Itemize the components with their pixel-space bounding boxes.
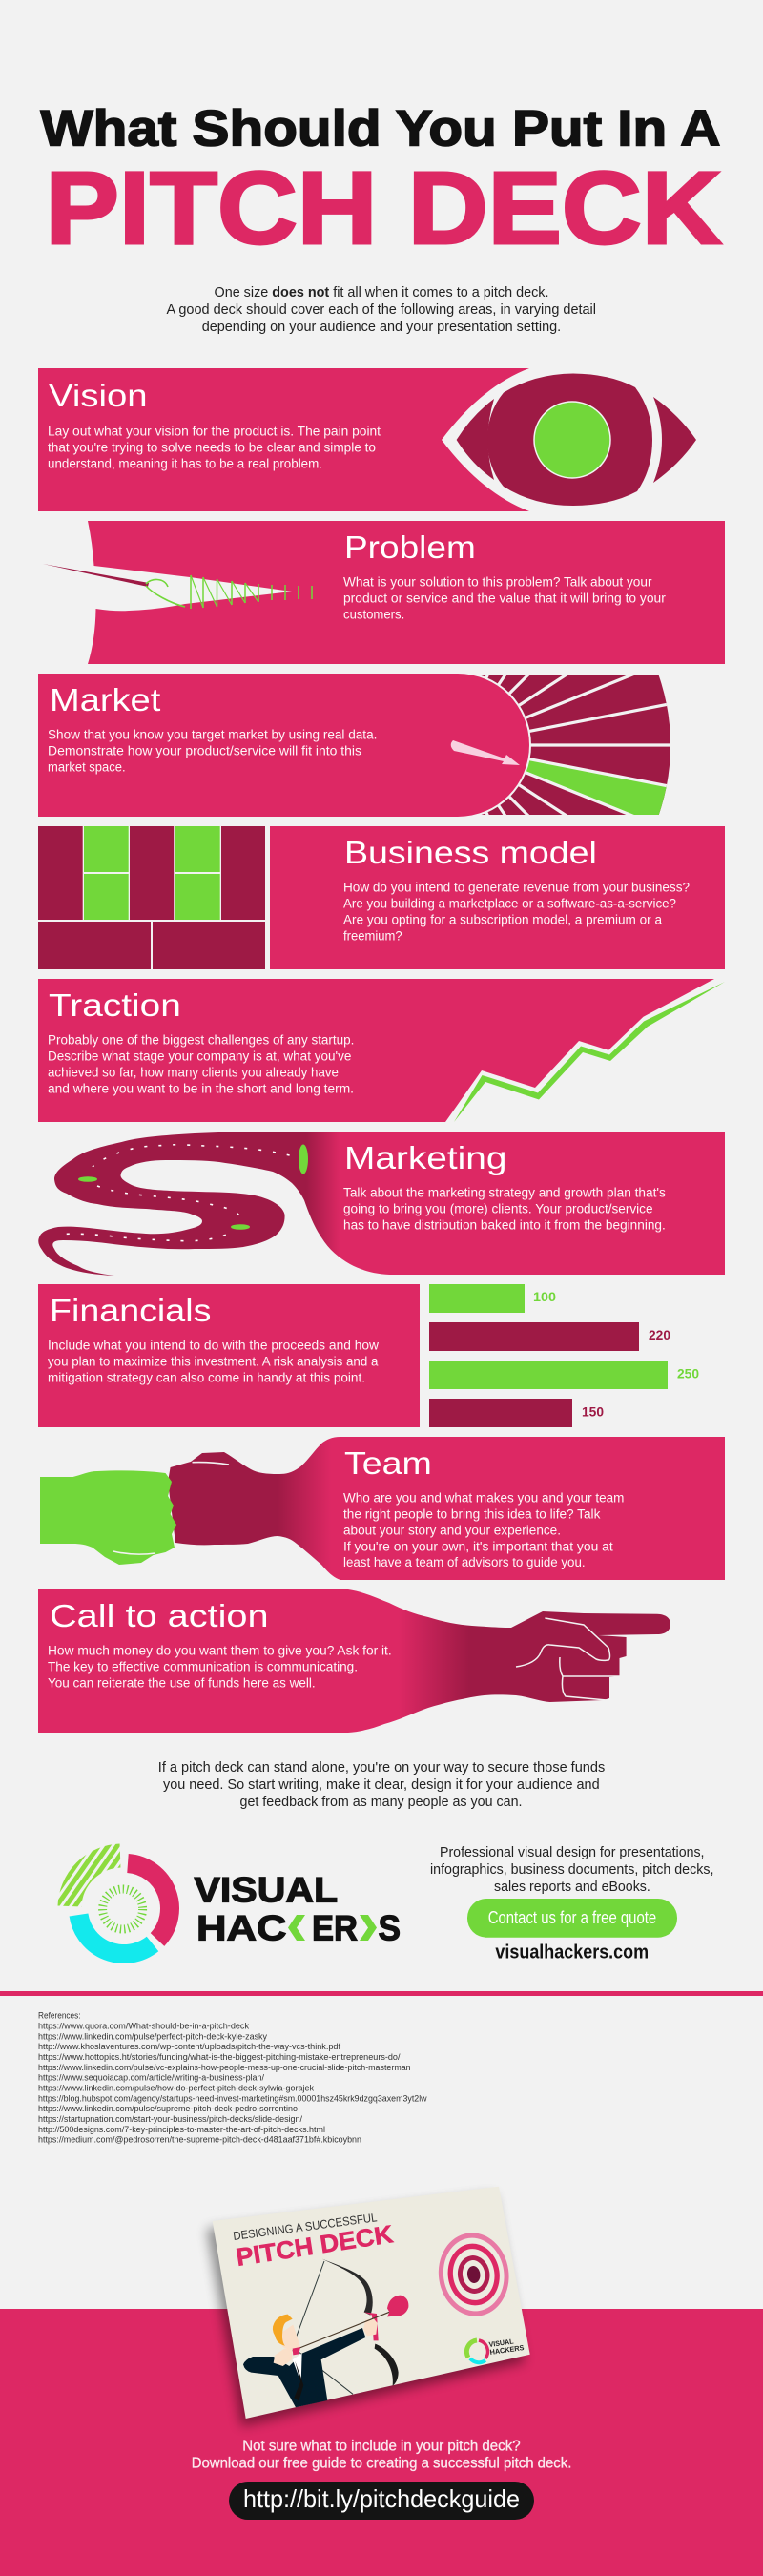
panel: marketing: has to have distribution baked into it from the beginning. (343, 1217, 666, 1233)
references: https://www.linkedin.com/pulse/how-do-perfect-pitch-deck-sylwia-gorajek (38, 2084, 314, 2093)
bar chart: financials (429, 1284, 699, 1427)
fist highlights (113, 1463, 229, 1554)
references: https://www.linkedin.com/pulse/vc-explains-how-people-mess-up-one-crucial-slide-pitch-masterman (38, 2063, 411, 2072)
closing text: get feedback from as many people as you can. (240, 1794, 523, 1810)
panel: team: Who are you and what makes you and your team (343, 1490, 624, 1506)
panel: business model: Business model (344, 835, 597, 870)
button: contact (467, 1899, 677, 1938)
logo: visual hackers: HAC (196, 1908, 287, 1948)
panel: problem: Problem (344, 530, 476, 565)
bar chart: financials: 150 (582, 1404, 604, 1420)
bar chart: financials: 250 (677, 1366, 699, 1381)
panel: marketing: going to bring you (more) clients. Your product/service (343, 1202, 652, 1215)
panel: call to action: You can reiterate the use of funds here as well. (48, 1675, 316, 1691)
logo: visual hackers: S (378, 1908, 401, 1948)
chart: market segments (481, 675, 670, 815)
icon: needle and thread (43, 564, 312, 609)
intro text: One size does not fit all when it comes to a pitch deck. (214, 284, 549, 301)
button: contact: Contact us for a free quote (488, 1908, 656, 1927)
contact block (430, 1844, 713, 1963)
card target (433, 2229, 514, 2320)
references: https://blog.hubspot.com/agency/startups-need-invest-marketing#sm.00001hsz45krk9dzgq3axem3yt2lw (38, 2093, 427, 2103)
panel: traction: Probably one of the biggest challenges of any startup. (48, 1032, 354, 1048)
card title: DESIGNING A SUCCESSFUL (233, 2211, 378, 2243)
bar chart: financials: 100 (533, 1289, 556, 1304)
closing text (158, 1759, 605, 1810)
panel: business model: Are you building a marketplace or a software-as-a-service? (343, 897, 676, 910)
references: https://www.sequoiacap.com/article/writing-a-business-plan/ (38, 2073, 264, 2083)
panel: call to action (38, 1589, 670, 1733)
footer band (0, 2309, 763, 2576)
panel: financials: Include what you intend to do with the proceeds and how (48, 1338, 379, 1353)
references: https://startupnation.com/start-your-business/pitch-decks/slide-design/ (38, 2114, 302, 2124)
title: What Should You Put In A (40, 101, 721, 156)
guide cover card (207, 2187, 530, 2426)
panel: problem: What is your solution to this problem? Talk about your (343, 574, 652, 590)
card archer (243, 2259, 408, 2407)
references: https://www.hottopics.ht/stories/funding/what-is-the-biggest-pitching-mistake-entrepreneurs-do/ (38, 2052, 401, 2062)
title: PITCH DECK (46, 150, 721, 265)
panel: team: If you're on your own, it's important that you at (343, 1540, 613, 1553)
card logo (466, 2337, 525, 2362)
logo: visual hackers: ER (312, 1908, 358, 1948)
card title: PITCH DECK (234, 2219, 395, 2272)
panel: market: Demonstrate how your product/service will fit into this (48, 744, 361, 758)
panel: traction: and where you want to be in the short and long term. (48, 1082, 354, 1095)
chart: business model grid (38, 826, 265, 969)
icon: pointer needle (451, 740, 520, 765)
panel: marketing (38, 1132, 725, 1276)
contact block: sales reports and eBooks. (494, 1879, 650, 1895)
closing text: you need. So start writing, make it clear, design it for your audience and (163, 1776, 600, 1793)
panel: financials: mitigation strategy can also come in handy at this point. (48, 1370, 365, 1385)
panel: marketing: Marketing (344, 1140, 506, 1175)
panel: problem: product or service and the value that it will bring to your (343, 592, 666, 605)
panel: team (40, 1437, 725, 1580)
references: http://www.khoslaventures.com/wp-content/uploads/pitch-the-way-vcs-think.pdf (38, 2042, 340, 2051)
panel: financials: Financials (50, 1293, 211, 1328)
panel: vision: Vision (49, 378, 148, 413)
panel: business model: How do you intend to generate revenue from your business? (343, 880, 690, 895)
download call to action: Not sure what to include in your pitch deck? (242, 2439, 521, 2454)
panel: business model: freemium? (343, 929, 402, 943)
hand outlines (516, 1618, 620, 1700)
logo: visual hackers: VISUAL (195, 1870, 338, 1910)
panel: vision (38, 368, 696, 511)
panel: traction: Describe what stage your company is at, what you've (48, 1049, 351, 1063)
panel: financials (38, 1284, 420, 1427)
bar chart: financials: 220 (649, 1327, 670, 1342)
download call to action (192, 2439, 571, 2471)
road markers (78, 1145, 308, 1230)
panel: vision: understand, meaning it has to be a real problem. (48, 456, 322, 471)
references: https://medium.com/@pedrosorren/the-supreme-pitch-deck-d481aaf371bf#.kbicoybnn (38, 2135, 361, 2145)
panel: traction (38, 979, 725, 1122)
card logo: VISUAL (488, 2337, 514, 2349)
references: https://www.linkedin.com/pulse/supreme-pitch-deck-pedro-sorrentino (38, 2104, 298, 2113)
panel: vision: Lay out what your vision for the product is. The pain point (48, 424, 381, 439)
panel: team: the right people to bring this idea to life? Talk (343, 1507, 601, 1521)
panel: market: Market (50, 682, 160, 717)
panel: traction: Traction (49, 987, 181, 1023)
intro text: A good deck should cover each of the following areas, in varying detail (166, 301, 596, 318)
references (38, 2011, 427, 2145)
route dots (56, 1145, 290, 1241)
logo: visual hackers (70, 1856, 401, 1954)
download call to action: Download our free guide to creating a successful pitch deck. (192, 2456, 571, 2471)
panel: call to action: The key to effective communication is communicating. (48, 1660, 358, 1673)
panel: problem (43, 521, 725, 664)
contact block: infographics, business documents, pitch decks, (430, 1861, 713, 1878)
panel: market (38, 674, 670, 817)
url pill: http://bit.ly/pitchdeckguide (243, 2484, 520, 2513)
panel: team: least have a team of advisors to guide you. (343, 1555, 586, 1569)
icon: green fist (40, 1470, 176, 1565)
panel: call to action: How much money do you want them to give you? Ask for it. (48, 1643, 392, 1658)
panel: problem: customers. (343, 607, 404, 622)
contact block: visualhackers.com (495, 1942, 649, 1963)
references: References: (38, 2011, 81, 2021)
icon: eye (457, 374, 696, 506)
closing text: If a pitch deck can stand alone, you're on your way to secure those funds (158, 1759, 605, 1776)
panel: market: Show that you know you target market by using real data. (48, 727, 377, 742)
panel: vision: that you're trying to solve needs to be clear and simple to (48, 441, 376, 454)
intro text (166, 284, 596, 335)
panel: marketing: Talk about the marketing strategy and growth plan that's (343, 1185, 666, 1200)
panel: traction: achieved so far, how many clients you already have (48, 1065, 339, 1080)
panel: call to action: Call to action (50, 1598, 269, 1633)
panel: market: market space. (48, 759, 126, 775)
contact block: Professional visual design for presentations, (440, 1844, 704, 1860)
title (40, 101, 721, 265)
panel: team: about your story and your experience. (343, 1523, 561, 1538)
card logo: HACKERS (489, 2343, 525, 2357)
panel: financials: you plan to maximize this investment. A risk analysis and a (48, 1355, 379, 1368)
intro text: depending on your audience and your presentation setting. (202, 319, 561, 335)
chart: growth line (454, 982, 725, 1122)
panel: business model: Are you opting for a subscription model, a premium or a (343, 912, 662, 927)
references: https://www.quora.com/What-should-be-in-a-pitch-deck (38, 2022, 249, 2031)
references: http://500designs.com/7-key-principles-to-master-the-art-of-pitch-decks.html (38, 2125, 325, 2134)
panel: business model (270, 826, 725, 969)
panel: team: Team (344, 1445, 432, 1481)
references: https://www.linkedin.com/pulse/perfect-pitch-deck-kyle-zasky (38, 2032, 267, 2042)
